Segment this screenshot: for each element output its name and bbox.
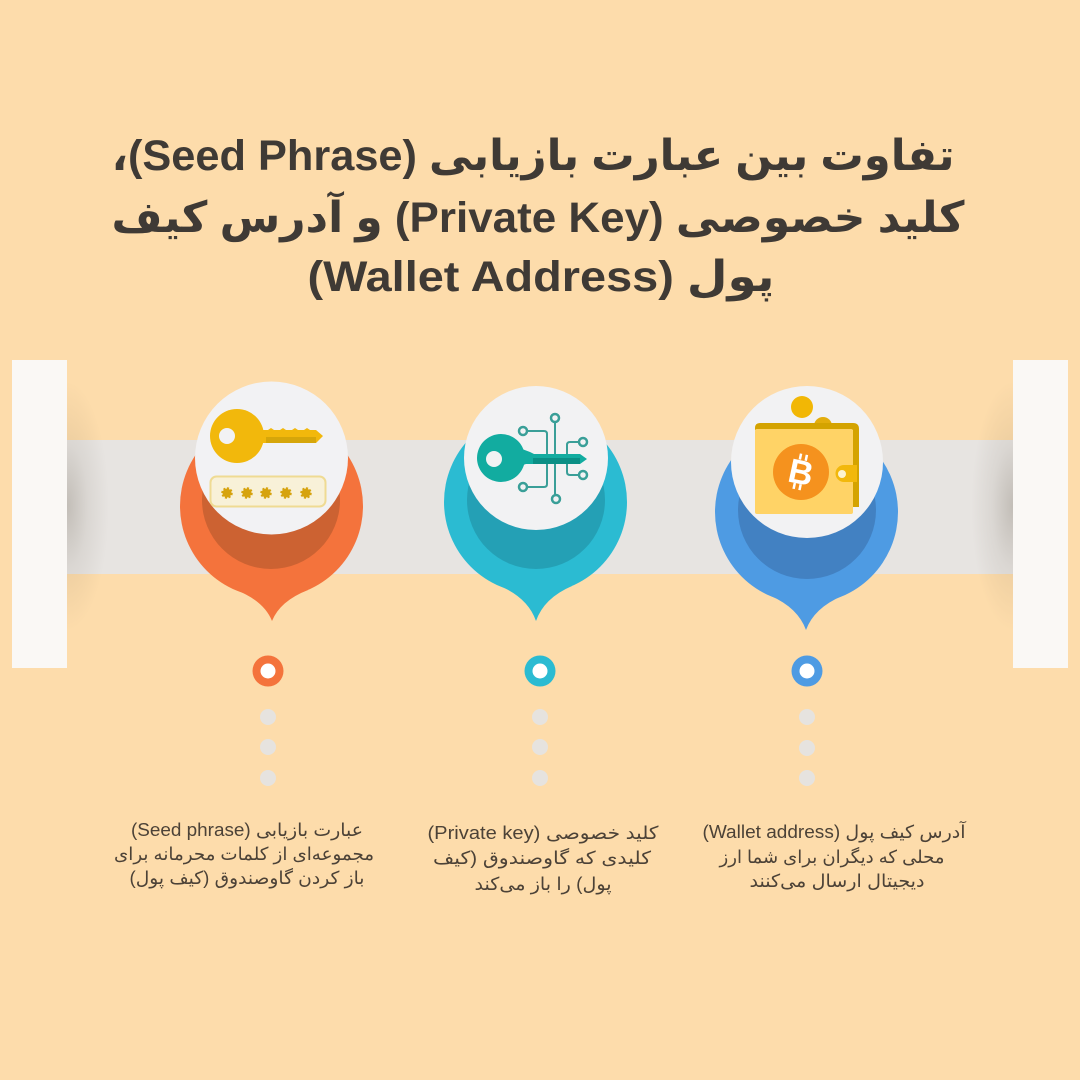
horizontal band <box>67 440 1013 574</box>
text block: seed phrase: عبارت بازیابی (Seed phrase) <box>131 820 363 840</box>
icon: digital key with circuit <box>477 414 587 503</box>
text block: private key <box>428 823 659 895</box>
icon: bitcoin wallet <box>755 396 859 514</box>
text block: wallet address: آدرس کیف پول (Wallet address) <box>702 820 967 843</box>
text block: seed phrase: مجموعه‌ای از کلمات محرمانه برای <box>114 844 374 865</box>
side shadows <box>25 381 1055 631</box>
icon: bitcoin wallet: B <box>785 452 817 494</box>
text block: seed phrase: باز کردن گاوصندوق (کیف پول) <box>130 867 364 889</box>
text block: private key: کلید خصوصی (Private key) <box>428 823 659 844</box>
title <box>112 132 965 302</box>
pin: wallet address <box>715 386 898 630</box>
text block: private key: کلیدی که گاوصندوق (کیف <box>433 847 651 869</box>
title: پول (Wallet Address) <box>308 253 774 302</box>
left white pillar <box>12 360 67 668</box>
text block: wallet address: دیجیتال ارسال می‌کنند <box>750 871 924 891</box>
timeline marker: wallet address <box>792 656 822 786</box>
right white pillar <box>1013 360 1068 668</box>
pin: seed phrase <box>180 382 363 621</box>
text block: seed phrase <box>114 820 374 889</box>
timeline marker: seed phrase <box>252 656 284 786</box>
icon: golden key and password field <box>210 409 326 506</box>
timeline marker: private key <box>524 656 556 786</box>
title: کلید خصوصی (Private Key) و آدرس کیف <box>112 191 964 243</box>
text block: wallet address: محلی که دیگران برای شما ارز <box>718 846 944 868</box>
title: تفاوت بین عبارت بازیابی (Seed Phrase)، <box>112 132 955 181</box>
text block: wallet address <box>702 820 967 891</box>
text block: private key: پول) را باز می‌کند <box>474 874 612 895</box>
pin: private key <box>444 386 627 621</box>
